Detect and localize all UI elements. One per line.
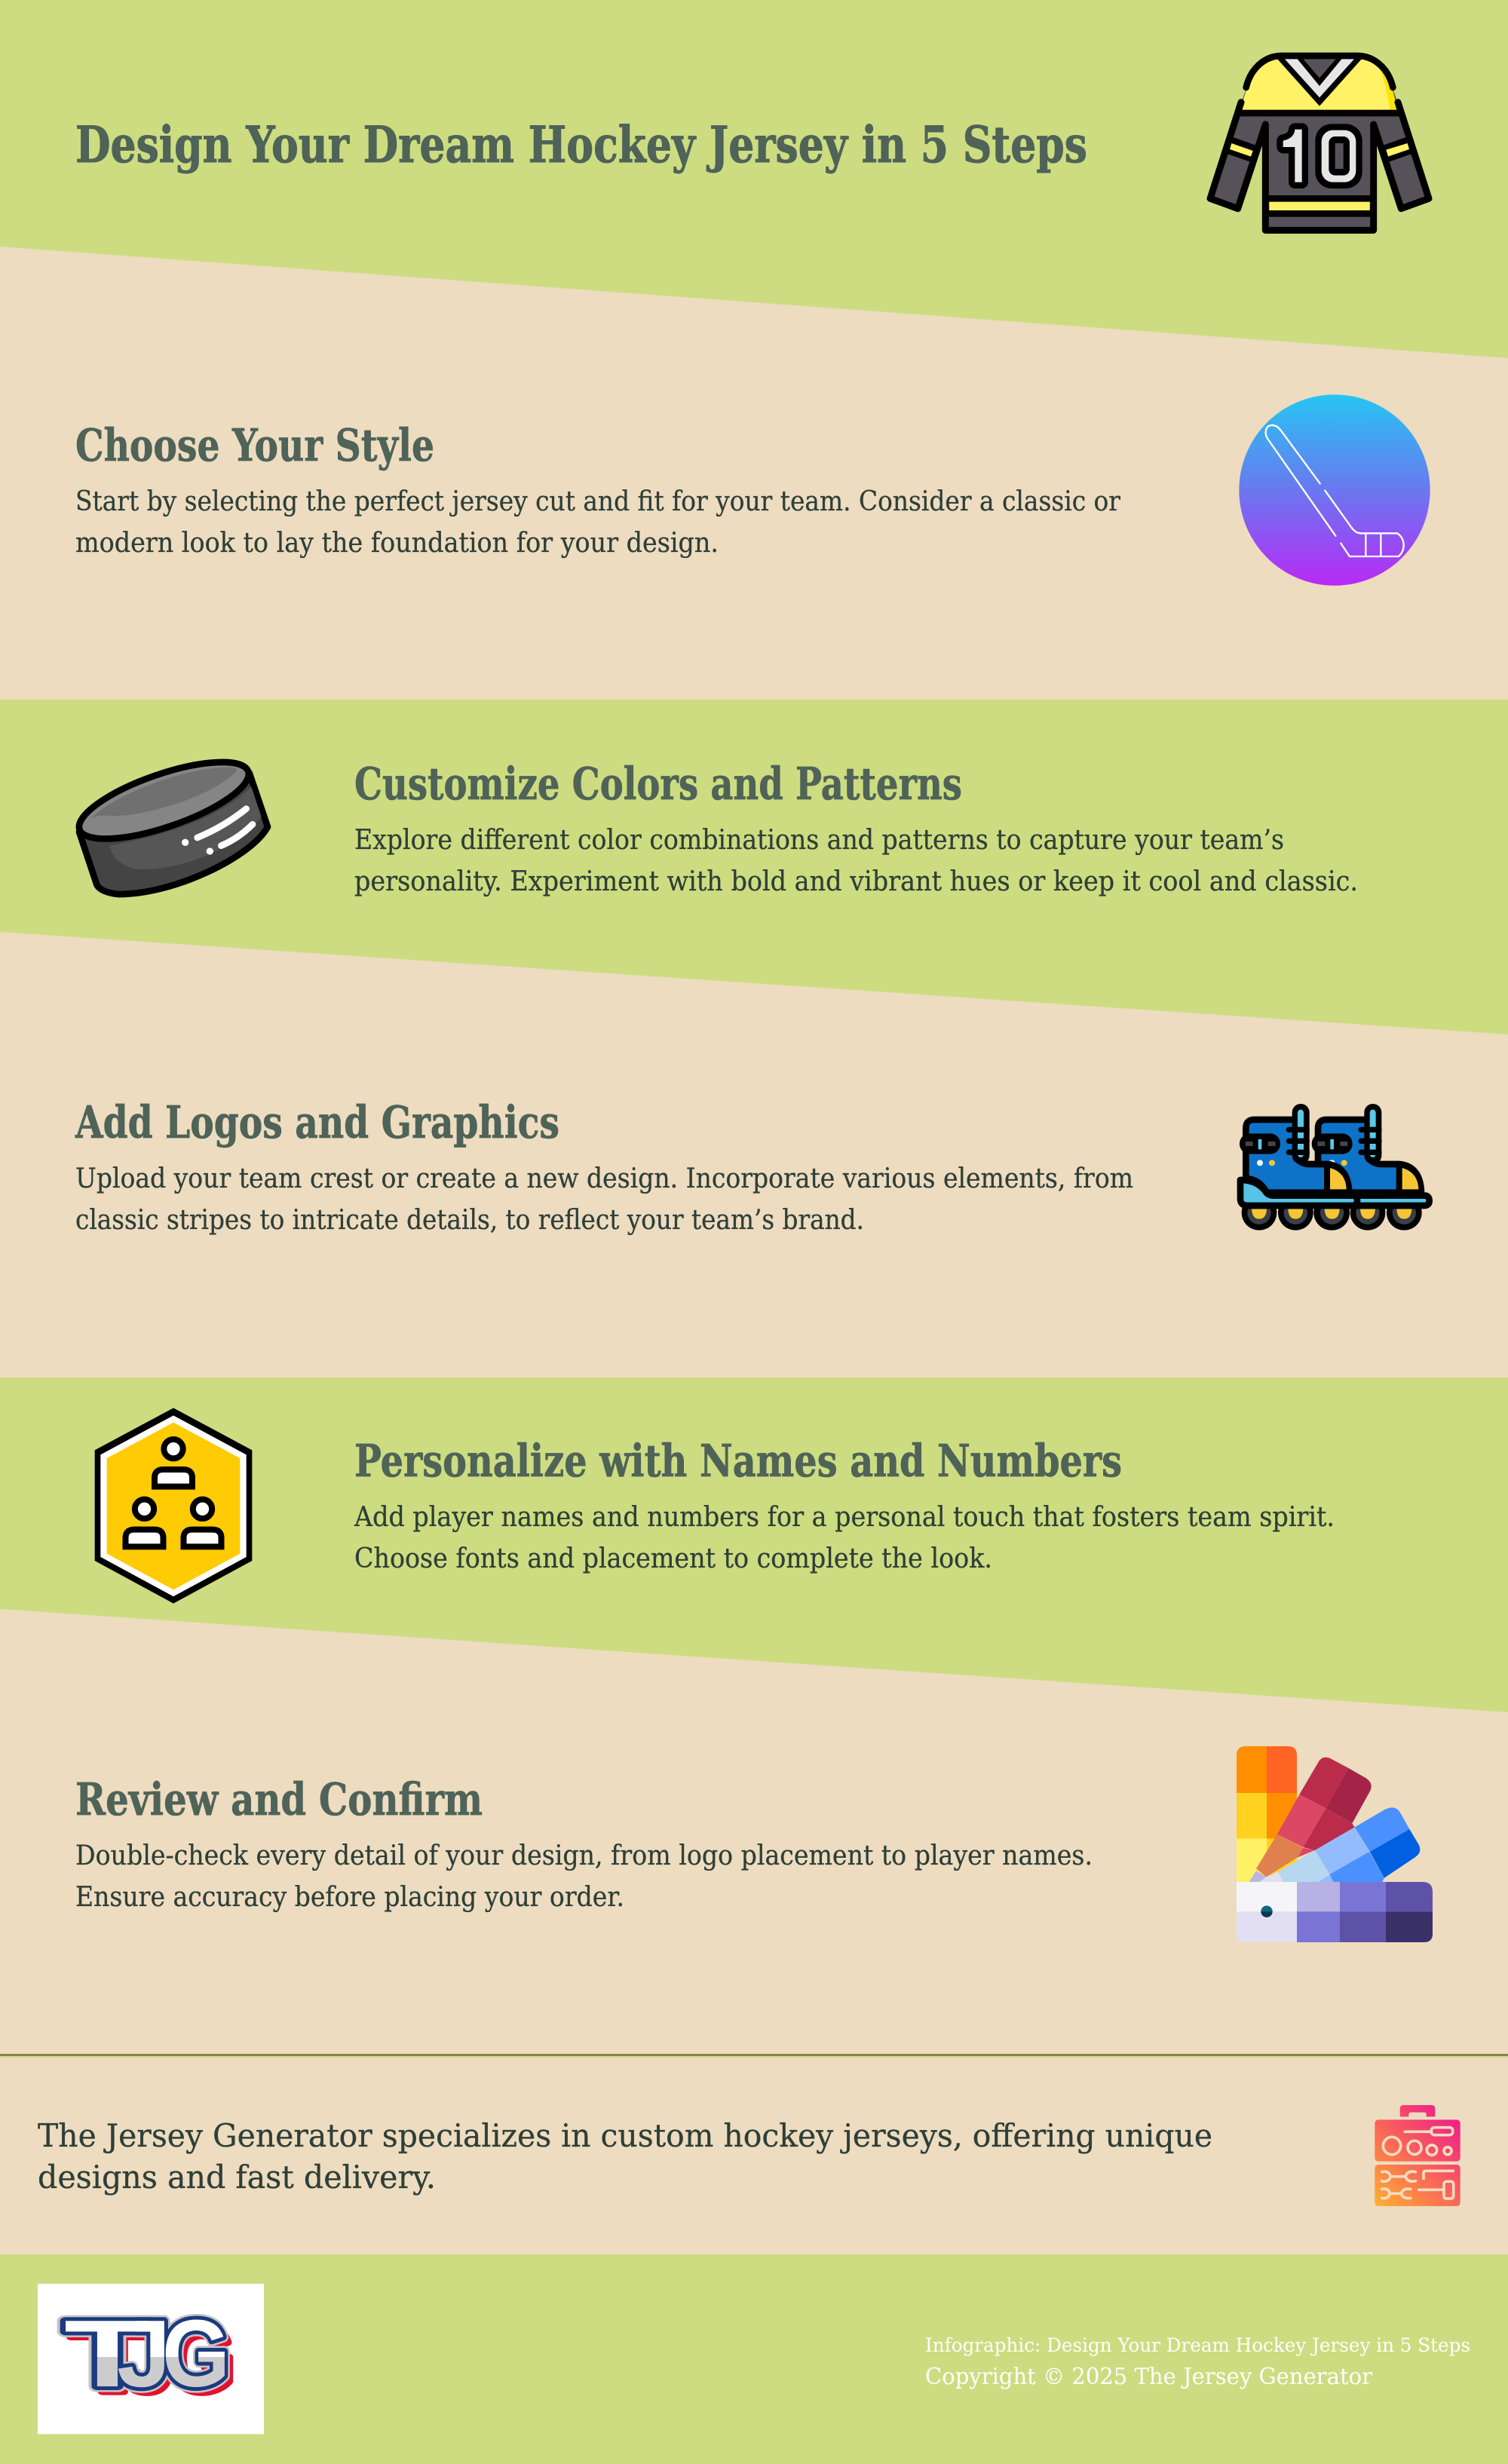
title: Design Your Dream Hockey Jersey in 5 Steps: [75, 115, 1087, 174]
heading: Review and Confirm: [75, 1773, 483, 1825]
company description: The Jersey Generator specializes in custom hockey jerseys, offering unique: [38, 2117, 1212, 2154]
icon: team hexagon: [95, 1408, 252, 1604]
body text: [354, 1502, 1335, 1574]
footer credit: Copyright © 2025 The Jersey Generator: [925, 2364, 1373, 2390]
body text: [354, 825, 1358, 897]
icon: hockey stick: [1239, 394, 1430, 586]
step 2: customize colors: [354, 758, 1358, 897]
body text: modern look to lay the foundation for your design.: [75, 528, 719, 559]
body text: Ensure accuracy before placing your order.: [75, 1882, 624, 1913]
icon: color swatch fan: [1237, 1746, 1433, 1942]
panel: header band: [0, 0, 1508, 358]
icon: inline skates: [1240, 1104, 1430, 1230]
body text: Add player names and numbers for a personal touch that fosters team spirit.: [354, 1502, 1335, 1533]
company description: designs and fast delivery.: [38, 2159, 436, 2196]
body text: Choose fonts and placement to complete the look.: [354, 1543, 992, 1574]
icon: hockey puck: [71, 746, 268, 894]
panel: step 2 band: [0, 700, 1508, 1034]
divider line: [0, 2054, 1508, 2058]
step 3: logos and graphics: [75, 1096, 1133, 1236]
body text: [75, 1840, 1093, 1913]
panel: step 4 band: [0, 1378, 1508, 1712]
footer credit: [925, 2334, 1470, 2390]
step 4: names and numbers: [354, 1435, 1335, 1574]
heading: Add Logos and Graphics: [75, 1096, 559, 1148]
body text: Start by selecting the perfect jersey cut and fit for your team. Consider a classic or: [75, 486, 1121, 517]
body text: [75, 486, 1121, 559]
body text: Explore different color combinations and patterns to capture your team’s: [354, 825, 1284, 856]
body text: Upload your team crest or create a new design. Incorporate various elements, from: [75, 1163, 1133, 1194]
body text: Double-check every detail of your design, from logo placement to player names.: [75, 1840, 1093, 1871]
body text: personality. Experiment with bold and vibrant hues or keep it cool and classic.: [354, 866, 1358, 897]
icon: hockey jersey: [1210, 56, 1429, 231]
icon: toolbox: [1375, 2105, 1460, 2206]
body text: classic stripes to intricate details, to reflect your team’s brand.: [75, 1205, 864, 1236]
body text: [75, 1163, 1133, 1236]
step 1: choose your style: [75, 419, 1121, 559]
company description: [38, 2117, 1212, 2196]
step 5: review and confirm: [75, 1773, 1093, 1913]
logo: TJG: [38, 2284, 264, 2434]
footer credit: Infographic: Design Your Dream Hockey Jersey in 5 Steps: [925, 2334, 1470, 2356]
heading: Personalize with Names and Numbers: [354, 1435, 1122, 1487]
heading: Customize Colors and Patterns: [354, 758, 962, 810]
panel: footer band: [0, 2254, 1508, 2464]
heading: Choose Your Style: [75, 419, 434, 471]
